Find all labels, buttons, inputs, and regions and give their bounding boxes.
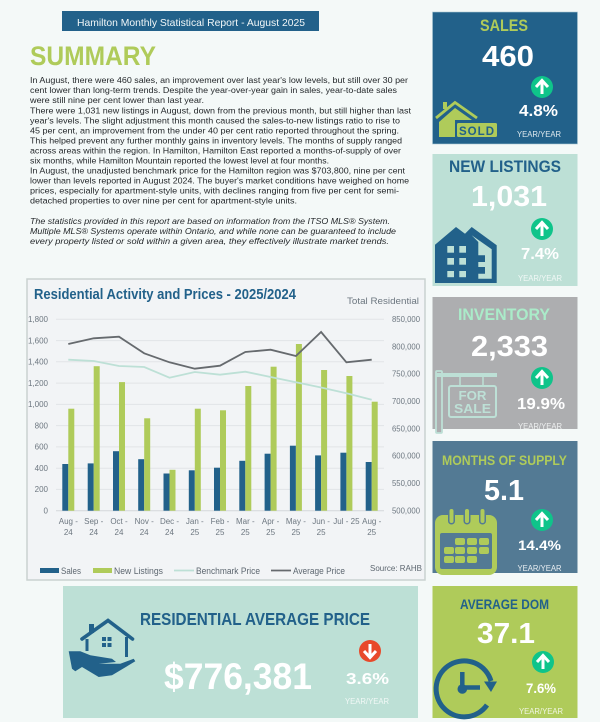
left axis labels: 1,600 (28, 336, 49, 345)
sales value: 460 (482, 41, 534, 73)
summary body text: six months, while Hamilton Mountain reported the lowest level at four months. (30, 156, 329, 166)
icon: up arrow (531, 76, 553, 98)
summary body text: cent lower than long-term trends. Despite the year-over-year gain in sales, year-to-date sales (30, 85, 397, 95)
summary body text: In August, there were 460 sales, an improvement over last year's low levels, but still over 30 per (30, 75, 408, 85)
left axis labels: 1,200 (28, 379, 49, 388)
chart legend (40, 566, 345, 576)
icon: clock (436, 661, 497, 717)
header banner: Hamilton Monthly Statistical Report - August 2025 (77, 17, 305, 29)
icon: up arrow (531, 367, 553, 389)
right axis labels: 800,000 (392, 342, 421, 351)
inventory change: 19.9% (517, 396, 565, 413)
sales bars (62, 446, 372, 511)
new listings change: 7.4% (521, 246, 559, 263)
average dom change: 7.6% (526, 681, 556, 696)
icon: up arrow (531, 218, 553, 240)
x axis labels: 25 (216, 528, 225, 537)
summary body text: detached properties to over nine per cent for apartment-style units. (30, 196, 297, 206)
new listings value: 1,031 (471, 181, 547, 213)
summary body text: There were 1,031 new listings in August, down from the previous month, but still higher than last (30, 105, 412, 115)
left axis labels: 200 (35, 485, 49, 494)
icon: up arrow (531, 509, 553, 531)
icon: sold house: SOLD (459, 126, 494, 138)
panel: new listings (432, 154, 578, 286)
x axis labels: 24 (140, 528, 149, 537)
icon: sold house (436, 102, 497, 138)
icon: up arrow (532, 651, 554, 673)
left axis labels: 1,000 (28, 400, 49, 409)
panel: inventory (432, 297, 578, 433)
summary body text: In August, the unadjusted benchmark price for the Hamilton region was $703,800, nine per cent (30, 166, 406, 176)
icon: for sale sign (436, 371, 497, 433)
x axis labels: 24 (115, 528, 124, 537)
left axis labels: 1,800 (28, 315, 49, 324)
icon: for sale sign: SALE (454, 402, 491, 416)
average dom value: 37.1 (477, 618, 535, 650)
panel: residential activity chart (27, 279, 425, 580)
average price heading: RESIDENTIAL AVERAGE PRICE (140, 609, 370, 629)
x axis labels: Oct - (110, 517, 128, 526)
x axis labels: Aug - (362, 517, 382, 526)
x axis labels: Apr - (262, 517, 280, 526)
x axis labels: 25 (291, 528, 301, 537)
title: summary: SUMMARY (30, 41, 156, 71)
right axis labels: 750,000 (392, 370, 421, 379)
x axis labels: 24 (89, 528, 99, 537)
average dom heading: AVERAGE DOM (460, 596, 549, 612)
chart legend: Average Price (293, 566, 345, 576)
benchmark price line (68, 360, 372, 400)
x axis labels: Mar - (236, 517, 255, 526)
x axis labels: 24 (64, 528, 73, 537)
summary body text: across areas within the region. In Hamilton, Hamilton East reported a months-of-supply of over (30, 146, 401, 156)
average price line (68, 332, 372, 369)
x axis labels: 25 (367, 528, 377, 537)
months of supply heading: MONTHS OF SUPPLY (442, 453, 567, 468)
x axis labels: Sep - (84, 517, 104, 526)
x axis labels: 25 (317, 528, 326, 537)
summary body text: 45 per cent, an improvement from the under 40 per cent ratio reported throughout the spring. (30, 125, 399, 135)
icon: apartment building (435, 227, 497, 283)
right axis labels (392, 315, 421, 515)
year over year label: YEAR/YEAR (518, 422, 562, 431)
sales heading: SALES (480, 16, 528, 35)
x axis labels: Feb - (211, 517, 230, 526)
year over year label: YEAR/YEAR (518, 564, 562, 573)
x axis labels: Dec - (160, 517, 179, 526)
disclaimer text: The statistics provided in this report are based on information from the ITSO MLS® System. (30, 216, 390, 226)
icon: house in hand (69, 620, 135, 677)
average price change: 3.6% (346, 671, 389, 688)
left axis labels: 0 (44, 506, 49, 515)
summary body text: This helped prevent any further monthly gains in inventory levels. The months of supply ranged (30, 135, 402, 145)
left axis labels: 800 (35, 421, 49, 430)
average price value: $776,381 (164, 656, 312, 697)
summary body text: year's levels. The slight adjustment this month caused the sales-to-new listings ratio to rise to (30, 115, 400, 125)
months of supply value: 5.1 (484, 475, 524, 507)
header banner (62, 11, 319, 31)
chart legend: Benchmark Price (196, 566, 260, 576)
icon: down arrow (359, 640, 381, 662)
chart subtitle: Total Residential (347, 296, 419, 307)
icon: calendar (435, 511, 497, 575)
year over year label: YEAR/YEAR (517, 130, 561, 139)
right axis labels: 550,000 (392, 479, 421, 488)
x axis labels (59, 517, 382, 537)
year over year label: YEAR/YEAR (345, 697, 389, 706)
right axis labels: 850,000 (392, 315, 421, 324)
disclaimer text: Multiple MLS® Systems operate within Ontario, and while none can be guaranteed to include (30, 226, 396, 236)
months of supply change: 14.4% (518, 537, 562, 553)
x axis labels: 25 (190, 528, 200, 537)
disclaimer text: every property listed or sold within a given area, they effectively illustrate market trends. (30, 236, 389, 246)
year over year label: YEAR/YEAR (519, 707, 563, 716)
inventory heading: INVENTORY (458, 305, 551, 324)
x axis labels: 24 (165, 528, 174, 537)
summary body text: prices, especially for apartment-style units, with declines ranging from five per cent for semi- (30, 186, 399, 196)
panel: residential average price (63, 586, 418, 718)
left axis labels: 600 (35, 443, 49, 452)
right axis labels: 650,000 (392, 424, 421, 433)
panel: average dom (432, 586, 578, 718)
x axis labels: May - (286, 517, 306, 526)
summary body text: lower than levels reported in August 2024. The buyer's market conditions have weighed on home (30, 176, 409, 186)
x axis labels: Nov - (135, 517, 154, 526)
icon: for sale sign: FOR (458, 389, 486, 403)
summary body text (29, 75, 412, 206)
x axis labels: 25 (266, 528, 276, 537)
right axis labels: 500,000 (392, 506, 421, 515)
x axis labels: Jun - (312, 517, 330, 526)
left axis labels (28, 315, 49, 515)
x axis labels: Jan - (186, 517, 204, 526)
chart title: Residential Activity and Prices - 2025/2024 (34, 287, 296, 303)
sales change: 4.8% (519, 103, 558, 120)
x axis labels: Aug - (59, 517, 78, 526)
new listings bars (68, 344, 378, 511)
inventory value: 2,333 (471, 331, 548, 363)
year over year label: YEAR/YEAR (518, 274, 562, 283)
x axis labels: Jul - 25 (333, 517, 360, 526)
right axis labels: 700,000 (392, 397, 421, 406)
x axis labels: 25 (241, 528, 250, 537)
disclaimer text (30, 216, 396, 246)
panel: months of supply (432, 441, 578, 575)
panel: sales (432, 12, 578, 144)
left axis labels: 400 (35, 464, 49, 473)
right axis labels: 600,000 (392, 452, 421, 461)
chart legend: New Listings (114, 566, 163, 576)
left axis labels: 1,400 (28, 358, 49, 366)
chart source: Source: RAHB (370, 563, 422, 573)
new listings heading: NEW LISTINGS (449, 157, 561, 176)
summary body text: were still nine per cent lower than last year. (29, 95, 204, 105)
chart legend: Sales (61, 566, 81, 576)
